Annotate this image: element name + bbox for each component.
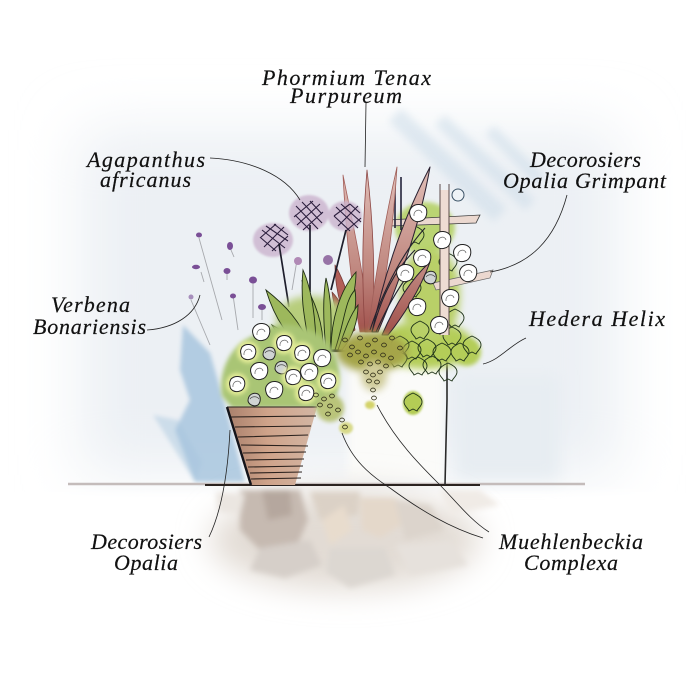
ground shadow	[210, 490, 500, 590]
label: Phormium Tenax Purpureum	[261, 65, 431, 108]
label: Verbena Bonariensis	[33, 292, 146, 339]
label: Muehlenbeckia Complexa: Muehlenbeckia	[498, 529, 643, 554]
label: Muehlenbeckia Complexa: Complexa	[524, 550, 618, 575]
label: Agapanthus africanus	[85, 147, 205, 192]
trellis	[388, 177, 493, 335]
label: Decorosiers Opalia	[90, 529, 202, 575]
label: Agapanthus africanus: africanus	[100, 167, 191, 192]
label: Verbena Bonariensis: Verbena	[51, 292, 130, 317]
label: Decorosiers Opalia: Decorosiers	[90, 529, 202, 554]
plant: verbena bonariensis	[188, 232, 333, 345]
label: Phormium Tenax Purpureum: Phormium Tenax	[261, 65, 431, 90]
pot	[227, 407, 317, 485]
plant: phormium tenax purpureum	[332, 167, 430, 335]
leader lines	[147, 103, 567, 538]
plant: climbing roses	[397, 189, 477, 334]
plant: agapanthus africanus	[253, 195, 362, 352]
label: Decorosiers Opalia Grimpant: Opalia Grimpant	[503, 168, 667, 193]
plant: hedera helix foliage	[377, 202, 481, 415]
label: Agapanthus africanus: Agapanthus	[85, 147, 205, 172]
label: Decorosiers Opalia: Opalia	[114, 550, 178, 575]
label: Phormium Tenax Purpureum: Purpureum	[289, 83, 402, 108]
label: Decorosiers Opalia Grimpant	[503, 147, 667, 193]
plant: muehlenbeckia complexa	[336, 332, 408, 409]
plant: trailing muehlenbeckia on pot	[314, 393, 353, 434]
plant: rose bush decorosiers opalia	[221, 323, 340, 408]
ground line	[68, 484, 585, 485]
trellis post	[445, 340, 447, 485]
label: Verbena Bonariensis: Bonariensis	[33, 314, 146, 339]
label: Hedera Helix: Hedera Helix	[528, 306, 665, 331]
label: Muehlenbeckia Complexa	[498, 529, 643, 575]
label: Decorosiers Opalia Grimpant: Decorosiers	[529, 147, 641, 172]
